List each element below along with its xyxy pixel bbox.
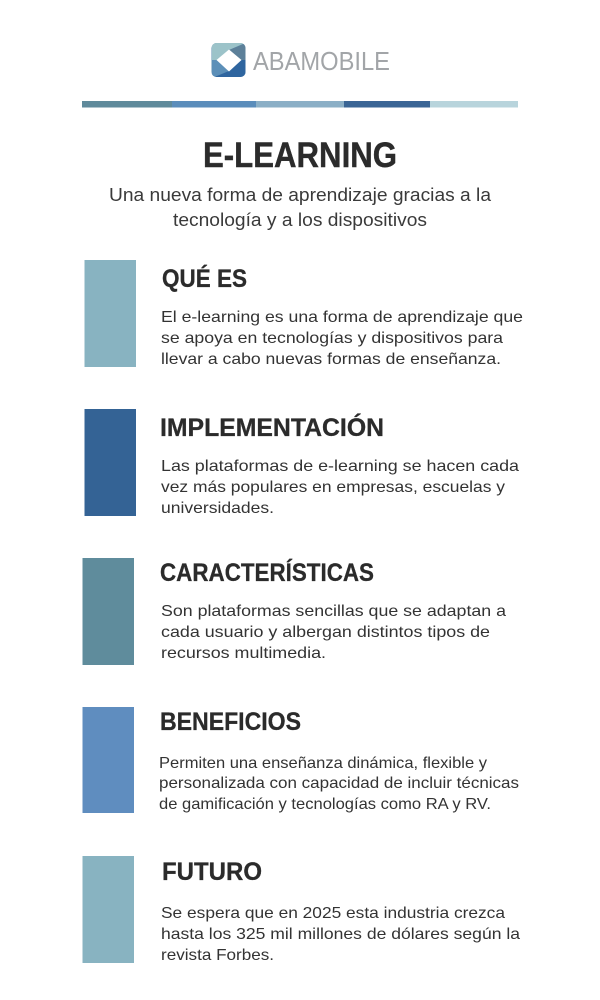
- heading: BENEFICIOS: [160, 708, 301, 736]
- heading: QUÉ ES: [162, 264, 247, 293]
- body text: hasta los 325 mil millones de dólares según la: [161, 926, 520, 943]
- panel: implementación: [84, 409, 519, 517]
- heading: CARACTERÍSTICAS: [160, 558, 374, 587]
- body text: [159, 755, 519, 813]
- body text: Permiten una enseñanza dinámica, flexible y: [159, 755, 487, 772]
- body text: vez más populares en empresas, escuelas y: [161, 479, 505, 496]
- colour block: [84, 409, 136, 516]
- panel: beneficios: [82, 707, 519, 813]
- body text: Son plataformas sencillas que se adaptan a: [161, 603, 506, 620]
- subtitle: Una nueva forma de aprendizaje gracias a la: [109, 185, 492, 205]
- body text: [161, 458, 519, 517]
- body text: revista Forbes.: [161, 947, 274, 964]
- body text: Las plataformas de e-learning se hacen cada: [161, 458, 519, 475]
- colour block: [84, 260, 136, 367]
- heading: IMPLEMENTACIÓN: [160, 412, 384, 442]
- subtitle: [109, 185, 492, 230]
- colour block: [82, 558, 134, 665]
- body text: [161, 309, 523, 368]
- body text: personalizada con capacidad de incluir técnicas: [159, 775, 519, 792]
- panel: qué es: [84, 260, 523, 368]
- body text: [161, 905, 520, 964]
- logo wordmark: ABAMOBILE: [253, 46, 390, 76]
- body text: [161, 603, 506, 662]
- body text: recursos multimedia.: [161, 645, 326, 662]
- heading: FUTURO: [162, 858, 262, 886]
- panel: características: [82, 558, 506, 665]
- body text: cada usuario y albergan distintos tipos de: [161, 624, 490, 641]
- colour divider bar: [82, 101, 518, 108]
- colour block: [82, 707, 134, 813]
- body text: llevar a cabo nuevas formas de enseñanza.: [161, 351, 501, 368]
- body text: de gamificación y tecnologías como RA y RV.: [159, 796, 491, 813]
- subtitle: tecnología y a los dispositivos: [173, 210, 427, 230]
- body text: Se espera que en 2025 esta industria crezca: [161, 905, 505, 922]
- logo: [211, 42, 390, 78]
- panel: futuro: [82, 856, 520, 964]
- colour block: [82, 856, 134, 963]
- body text: universidades.: [161, 500, 274, 517]
- title: E-LEARNING: [203, 136, 397, 175]
- body text: se apoya en tecnologías y dispositivos para: [161, 330, 503, 347]
- icon: logo mark: [211, 42, 246, 78]
- body text: El e-learning es una forma de aprendizaje que: [161, 309, 523, 326]
